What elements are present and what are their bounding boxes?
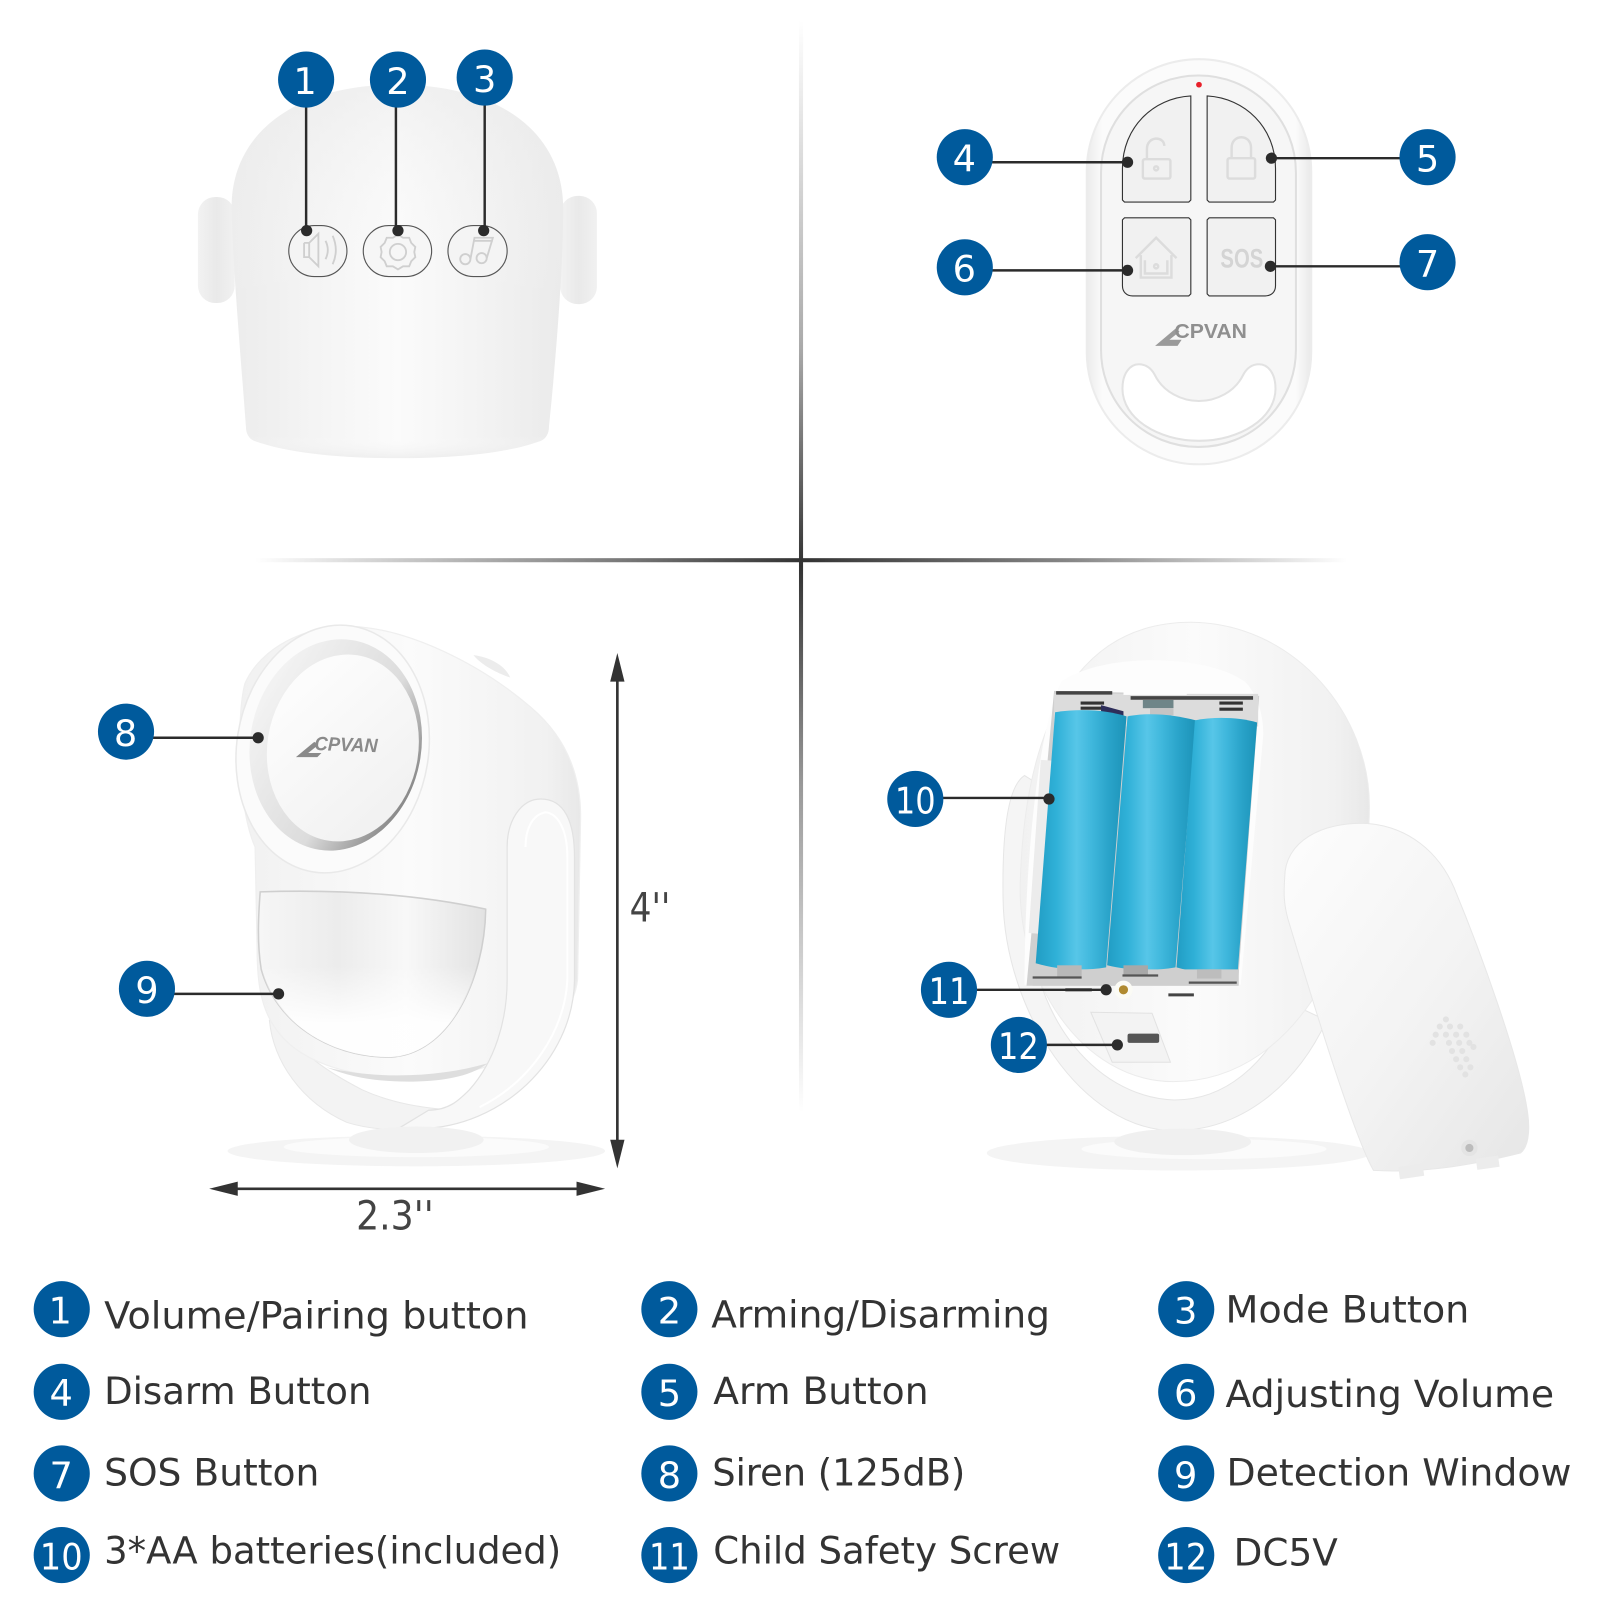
legend item 11: Child Safety Screw bbox=[713, 1528, 1060, 1572]
legend item 8: Siren (125dB) bbox=[712, 1451, 965, 1495]
remote outer shell bbox=[1087, 59, 1311, 464]
bracket ring bbox=[1003, 776, 1327, 1131]
legend item 3 bbox=[1158, 1281, 1469, 1337]
wall mount base bbox=[987, 1136, 1370, 1170]
divider: horizontal bbox=[255, 558, 1347, 562]
callout 5: 5 bbox=[1416, 137, 1439, 180]
callout 12 bbox=[991, 1017, 1123, 1073]
side rib left bbox=[1029, 760, 1055, 934]
bracket band bbox=[400, 799, 574, 1129]
legend item 5 bbox=[641, 1364, 929, 1420]
legend bbox=[34, 1281, 1571, 1583]
logo: CPVAN bbox=[1155, 321, 1247, 346]
detection window bbox=[258, 891, 486, 1057]
callout 11: 11 bbox=[929, 970, 969, 1013]
battery 3 bbox=[1177, 718, 1257, 973]
dimension: height label: 4'' bbox=[630, 885, 670, 931]
legend item 1 bbox=[34, 1281, 529, 1338]
back of bracket bbox=[269, 1020, 449, 1130]
callout 2 bbox=[370, 52, 426, 236]
legend item 9: Detection Window bbox=[1227, 1451, 1571, 1495]
sensor body back bbox=[1020, 622, 1369, 1082]
callout 9: 9 bbox=[135, 969, 159, 1012]
callout 2: 2 bbox=[386, 60, 410, 103]
cover clip left bbox=[1398, 1164, 1424, 1179]
under-body shadow bbox=[327, 1063, 488, 1082]
callout 4: 4 bbox=[953, 137, 976, 180]
legend item 12: 12 bbox=[1164, 1535, 1207, 1578]
cover screw hole bbox=[1461, 1140, 1478, 1156]
callout 4 bbox=[937, 129, 1133, 185]
top button bump bbox=[473, 655, 510, 678]
legend item 10: 10 bbox=[40, 1535, 83, 1578]
logo: CPVAN: CPVAN bbox=[1174, 321, 1247, 343]
panel: front view of sensor bbox=[209, 611, 670, 1240]
compartment cavity bbox=[1027, 691, 1259, 986]
sensor body bbox=[240, 626, 581, 1078]
button: volume bbox=[289, 226, 347, 277]
legend item 8: 8 bbox=[658, 1454, 681, 1497]
callout 8 bbox=[98, 704, 264, 760]
button: mode bbox=[448, 226, 507, 277]
button: arming bbox=[363, 226, 432, 277]
legend item 12 bbox=[1158, 1527, 1338, 1583]
callout 5 bbox=[1266, 129, 1456, 185]
legend item 3: Mode Button bbox=[1226, 1287, 1469, 1331]
legend item 7 bbox=[34, 1445, 319, 1502]
callout 12: 12 bbox=[998, 1025, 1039, 1068]
icon: sensor left pivot bbox=[198, 197, 235, 303]
panel: top view of sensor bbox=[198, 85, 597, 458]
legend item 7: 7 bbox=[50, 1454, 73, 1497]
button: arm bbox=[1207, 96, 1276, 202]
callout 11 bbox=[921, 962, 1112, 1018]
slot marks bbox=[1065, 990, 1194, 995]
callout 9 bbox=[119, 961, 284, 1017]
panel: remote control bbox=[1087, 59, 1311, 464]
legend item 2: Arming/Disarming bbox=[711, 1293, 1050, 1337]
callout 10 bbox=[887, 771, 1055, 827]
compartment rim bbox=[1024, 660, 1263, 985]
red LED bbox=[1196, 82, 1202, 88]
panel: battery compartment view bbox=[987, 622, 1529, 1179]
callout 6: 6 bbox=[953, 248, 976, 291]
legend item 4 bbox=[34, 1364, 371, 1420]
legend item 11 bbox=[641, 1527, 1060, 1583]
icon: sensor right pivot bbox=[560, 196, 597, 304]
legend item 1: 1 bbox=[49, 1289, 72, 1332]
button: SOS: SOS bbox=[1220, 243, 1263, 273]
legend item 5: 5 bbox=[658, 1372, 681, 1415]
callout 7: 7 bbox=[1416, 243, 1439, 286]
legend item 6 bbox=[1158, 1364, 1554, 1420]
dimension: width arrow bbox=[209, 1182, 605, 1196]
battery 1 bbox=[1036, 710, 1127, 969]
remote inner face bbox=[1101, 76, 1296, 447]
key ring slot bbox=[1122, 364, 1276, 441]
callout 7 bbox=[1265, 234, 1456, 290]
legend item 2: 2 bbox=[658, 1289, 681, 1332]
legend item 1: Volume/Pairing button bbox=[104, 1294, 529, 1338]
charging port recess bbox=[1091, 1012, 1170, 1062]
legend item 9: 9 bbox=[1174, 1454, 1197, 1497]
divider: vertical bbox=[799, 20, 803, 1112]
cover clip right bbox=[1476, 1156, 1500, 1170]
button: disarm bbox=[1122, 96, 1191, 202]
callout 6 bbox=[937, 239, 1133, 295]
legend item 6: Adjusting Volume bbox=[1226, 1372, 1554, 1416]
legend item 5: Arm Button bbox=[713, 1369, 929, 1413]
legend item 8 bbox=[641, 1445, 965, 1502]
callout 3: 3 bbox=[473, 58, 496, 101]
callout 3 bbox=[457, 49, 513, 236]
button: SOS bbox=[1207, 218, 1276, 296]
button: adjust volume bbox=[1122, 218, 1191, 296]
battery contacts top bbox=[1054, 679, 1258, 727]
base pivot bbox=[349, 1127, 484, 1153]
callout 8: 8 bbox=[114, 712, 137, 755]
legend item 4: Disarm Button bbox=[104, 1369, 371, 1413]
sensor body bbox=[232, 85, 563, 458]
battery 2 bbox=[1107, 714, 1196, 970]
base pivot bbox=[1114, 1129, 1251, 1155]
right pivot bbox=[1312, 783, 1361, 840]
legend item 2 bbox=[641, 1281, 1050, 1337]
legend item 10: 3*AA batteries(included) bbox=[104, 1528, 561, 1572]
siren disc bbox=[254, 643, 432, 852]
callout 1: 1 bbox=[293, 60, 317, 103]
legend item 12: DC5V bbox=[1234, 1530, 1338, 1574]
siren horn inner ring bbox=[234, 627, 437, 863]
legend item 6: 6 bbox=[1174, 1372, 1197, 1415]
battery cover bbox=[1284, 823, 1529, 1179]
child safety screw bbox=[1114, 981, 1133, 999]
callout 10: 10 bbox=[895, 779, 936, 822]
siren horn outer bbox=[218, 611, 447, 887]
wall mount base bbox=[228, 1136, 605, 1166]
logo: CPVAN on siren: CPVAN bbox=[314, 733, 379, 757]
callout 1 bbox=[278, 52, 334, 236]
legend item 7: SOS Button bbox=[104, 1451, 319, 1495]
cover grip dots bbox=[1430, 1016, 1477, 1078]
dimension: width label: 2.3'' bbox=[356, 1194, 434, 1240]
legend item 3: 3 bbox=[1174, 1289, 1197, 1332]
legend item 11: 11 bbox=[649, 1535, 690, 1578]
legend item 10 bbox=[34, 1527, 561, 1583]
battery contacts bottom bbox=[1033, 965, 1239, 986]
dimension: height arrow bbox=[610, 653, 624, 1168]
legend item 9 bbox=[1158, 1445, 1571, 1502]
legend item 4: 4 bbox=[50, 1372, 73, 1415]
